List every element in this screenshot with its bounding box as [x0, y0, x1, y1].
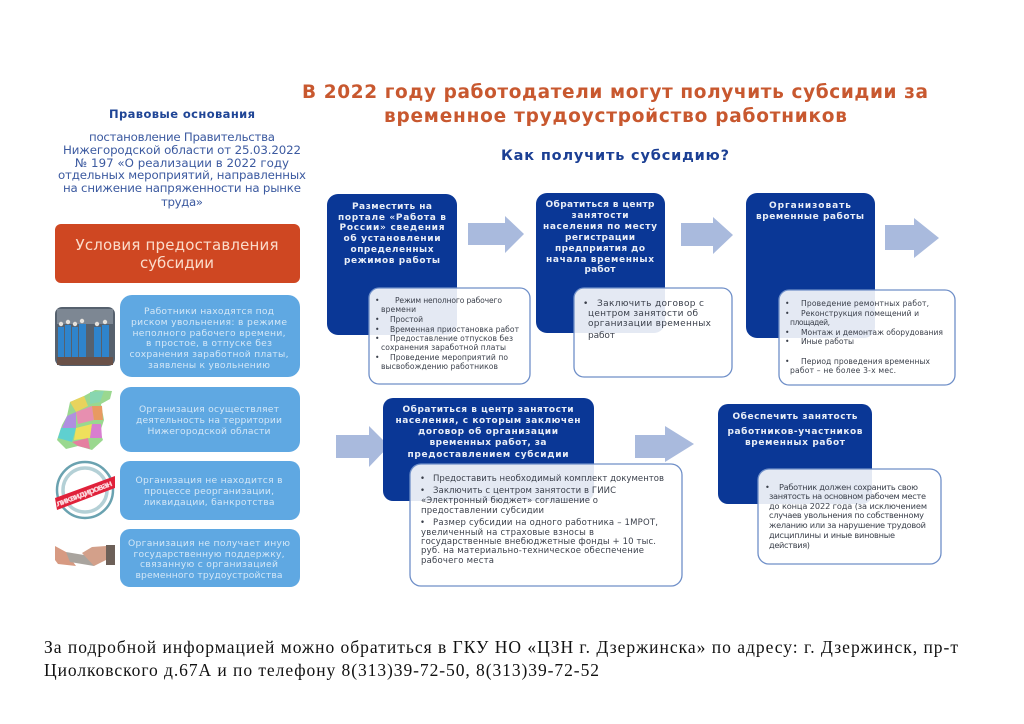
panel: step 4 details: • — [420, 474, 425, 484]
panel: step 5 details: желанию или за нарушение трудовой — [769, 520, 926, 530]
text block: legal basis — [58, 130, 306, 209]
panel: step 5 details: дисциплины и иные виновные — [769, 530, 895, 540]
panel: step 5 details: действия) — [769, 540, 810, 550]
panel: step 3 details: Монтаж и демонтаж оборудования — [801, 328, 943, 337]
panel: step 3 — [746, 193, 875, 338]
panel: condition 2: Нижегородской области — [148, 426, 271, 437]
subtitle: how to get the subsidy: Как получить субсидию? — [501, 148, 729, 164]
title — [302, 82, 928, 127]
panel: step 4 details: Заключить с центром занятости в ГИИС — [433, 486, 616, 496]
panel: step 1 details: сохранения заработной платы — [381, 343, 506, 352]
heading: legal basis: Правовые основания — [109, 107, 255, 121]
panel: step 3 details: Реконструкция помещений и — [801, 309, 919, 318]
panel: step 3: временные работы — [756, 211, 864, 222]
text block: legal basis: на снижение напряженности на рынке — [63, 181, 301, 195]
panel: step 2: населения по месту — [543, 222, 657, 232]
panel: step 2: работ — [584, 264, 616, 275]
text block: legal basis: Нижегородской области от 25.03.2022 — [63, 143, 301, 157]
panel: step 3 details: • — [785, 299, 789, 308]
panel: step 4 details: Размер субсидии на одного работника – 1МРОТ, — [433, 518, 658, 528]
footer: contact information: Циолковского д.67А и по телефону 8(313)39-72-50, 8(313)39-72-52 — [44, 660, 599, 680]
panel: step 4 details — [410, 464, 682, 586]
panel: condition 4: Организация не получает иную — [128, 538, 290, 549]
panel: step 3 details: • — [785, 328, 789, 337]
text block: legal basis: № 197 «О реализации в 2022 году — [75, 156, 289, 170]
panel: condition 1 — [120, 295, 300, 377]
panel: condition 1: в простое, в отпуске без — [146, 338, 272, 349]
text block: legal basis: труда» — [161, 195, 203, 209]
panel: step 1 details: • — [375, 315, 379, 324]
panel: step 4 details: • — [420, 518, 425, 528]
panel: step 1 details: • — [375, 334, 379, 343]
panel: step 4: предоставлением субсидии — [408, 449, 568, 460]
panel: step 5 details: случаев увольнения по собственному — [769, 510, 924, 520]
panel: step 1 details: Простой — [390, 315, 423, 324]
arrow: step 4 to step 5 — [635, 426, 694, 462]
panel: condition 1: Работники находятся под — [144, 306, 274, 317]
panel: condition 3: ликвидации, банкротства — [144, 497, 274, 508]
panel: step 5 — [718, 404, 872, 504]
panel: step 5 details: до конца 2022 года (за исключением — [769, 501, 927, 511]
panel: step 4: временных работ, за — [430, 437, 546, 448]
panel: step 5: Обеспечить занятость — [732, 411, 858, 422]
panel: step 1: Разместить на — [352, 202, 432, 212]
panel: step 5: работников-участников — [728, 426, 863, 437]
panel: step 1 details: • — [375, 325, 379, 334]
panel: condition 1: сохранения заработной платы, — [130, 349, 289, 360]
panel: condition 4 — [120, 529, 300, 587]
panel: condition 2: Организация осуществляет — [139, 404, 280, 415]
panel: step 3 details: площадей, — [790, 318, 830, 327]
panel: step 1: России» сведения — [340, 223, 445, 233]
panel: step 2 details: организации временных — [588, 319, 712, 329]
icon: hands passing money — [55, 545, 115, 566]
panel: condition 4: связанную с организацией — [140, 559, 278, 570]
panel: step 2: начала временных — [546, 255, 654, 265]
panel: step 3 details — [779, 290, 955, 385]
panel: subsidy conditions header — [55, 224, 300, 283]
panel: step 3: Организовать — [769, 201, 851, 211]
panel: step 3 details: Проведение ремонтных работ, — [801, 299, 929, 308]
arrow: step 1 to step 2 — [468, 216, 524, 253]
panel: condition 2 — [120, 387, 300, 452]
title: временное трудоустройство работников — [384, 106, 847, 127]
panel: step 5 details — [758, 469, 941, 564]
panel: step 2 details: • — [583, 299, 588, 309]
panel: step 1 details: Предоставление отпусков без — [390, 334, 513, 343]
panel: step 2 details — [574, 288, 732, 377]
footer: contact information: За подробной информацией можно обратиться в ГКУ НО «ЦЗН г. Дзержинска» по адресу: г. Дзержинск, пр-т — [44, 637, 958, 657]
panel: condition 1: неполного рабочего времени, — [132, 328, 286, 339]
arrow: step 2 to step 3 — [681, 217, 733, 254]
panel: step 2 details: Заключить договор с — [597, 299, 704, 309]
panel: condition 3: Организация не находится в — [136, 475, 282, 486]
panel: step 3 details: • — [785, 337, 789, 346]
icon: liquidation stamp: ликвидирован — [54, 479, 114, 510]
panel: step 4 details: государственные внебюджетные фонды + 10 тыс. — [421, 537, 656, 547]
panel: step 4 details: Предоставить необходимый комплект документов — [433, 474, 664, 484]
panel: condition 1: риском увольнения: в режиме — [131, 317, 287, 328]
panel: step 1 details: Проведение мероприятий по — [390, 353, 508, 362]
panel: step 5: временных работ — [745, 437, 846, 448]
panel: step 4 details: рабочего места — [421, 556, 494, 566]
panel: step 3 details: работ – не более 3-х мес. — [790, 366, 896, 375]
panel: step 2 details: работ — [588, 331, 615, 341]
panel: step 1 details: • — [375, 353, 379, 362]
panel: step 4: населения, с которым заключен — [396, 416, 580, 426]
panel: condition 1: заявлены к увольнению — [148, 360, 270, 371]
panel: step 1 details: Режим неполного рабочего — [395, 296, 502, 305]
text block: legal basis: отдельных мероприятий, направленных — [58, 168, 306, 182]
panel: step 2: предприятия до — [555, 244, 645, 254]
icon: liquidation stamp — [54, 462, 115, 518]
panel: step 4 — [383, 398, 594, 501]
panel: step 4 details: увеличенный на страховые взносы в — [421, 528, 594, 538]
panel: step 1: определенных — [350, 245, 434, 255]
arrow: into step 4 — [336, 426, 389, 467]
panel: step 3 details: Период проведения временных — [801, 357, 930, 366]
panel: step 4: Обратиться в центр занятости — [402, 404, 574, 415]
panel: step 1: об установлении — [344, 233, 440, 244]
title: В 2022 году работодатели могут получить субсидии за — [302, 82, 928, 103]
footer: contact information — [44, 637, 958, 680]
panel: step 4 details: руб. на материально-техническое обеспечение — [421, 546, 644, 556]
panel: step 1 details: Временная приостановка работ — [390, 325, 520, 334]
panel: step 3 details: • — [785, 309, 789, 318]
panel: step 1 details — [369, 288, 530, 384]
panel: condition 3: процессе реорганизации, — [144, 486, 274, 497]
panel: step 5 details: • — [765, 482, 770, 492]
panel: step 1: портале «Работа в — [338, 212, 446, 223]
panel: condition 3 — [120, 461, 300, 520]
panel: step 1 — [327, 194, 457, 335]
panel: step 1 details: • — [375, 296, 379, 305]
panel: step 2: занятости — [572, 211, 628, 221]
panel: condition 2: деятельность на территории — [136, 415, 282, 426]
panel: step 2: Обратиться в центр — [546, 199, 655, 210]
panel: step 3 details: • — [785, 357, 789, 366]
icon: workers photo — [55, 307, 115, 366]
panel: step 3 details: Иные работы — [801, 337, 854, 346]
panel: step 4: договор об организации — [418, 426, 558, 437]
text block: legal basis: постановление Правительства — [89, 130, 275, 144]
panel: step 5 details: занятость на основном рабочем месте — [769, 491, 926, 501]
arrow: step 3 onward — [885, 218, 939, 258]
panel: step 4 details: «Электронный бюджет» соглашение о — [421, 496, 598, 506]
panel: condition 4: государственную поддержку, — [134, 549, 285, 560]
panel: subsidy conditions header: субсидии — [140, 254, 214, 272]
panel: step 4 details: предоставлении субсидии — [421, 506, 544, 516]
icon: regional map — [57, 390, 112, 450]
panel: step 1: режимов работы — [344, 255, 440, 266]
panel: step 2: регистрации — [565, 233, 635, 243]
panel: step 4 details: • — [420, 486, 425, 496]
panel: step 5 details: Работник должен сохранить свою — [779, 482, 918, 492]
panel: subsidy conditions header: Условия предоставления — [76, 236, 278, 254]
panel: condition 4: временного трудоустройства — [136, 570, 282, 581]
panel: step 1 details: высвобождению работников — [381, 362, 499, 371]
panel: step 2 details: центром занятости об — [588, 309, 698, 319]
panel: step 2 — [536, 193, 665, 333]
panel: step 1 details: времени — [381, 305, 416, 314]
